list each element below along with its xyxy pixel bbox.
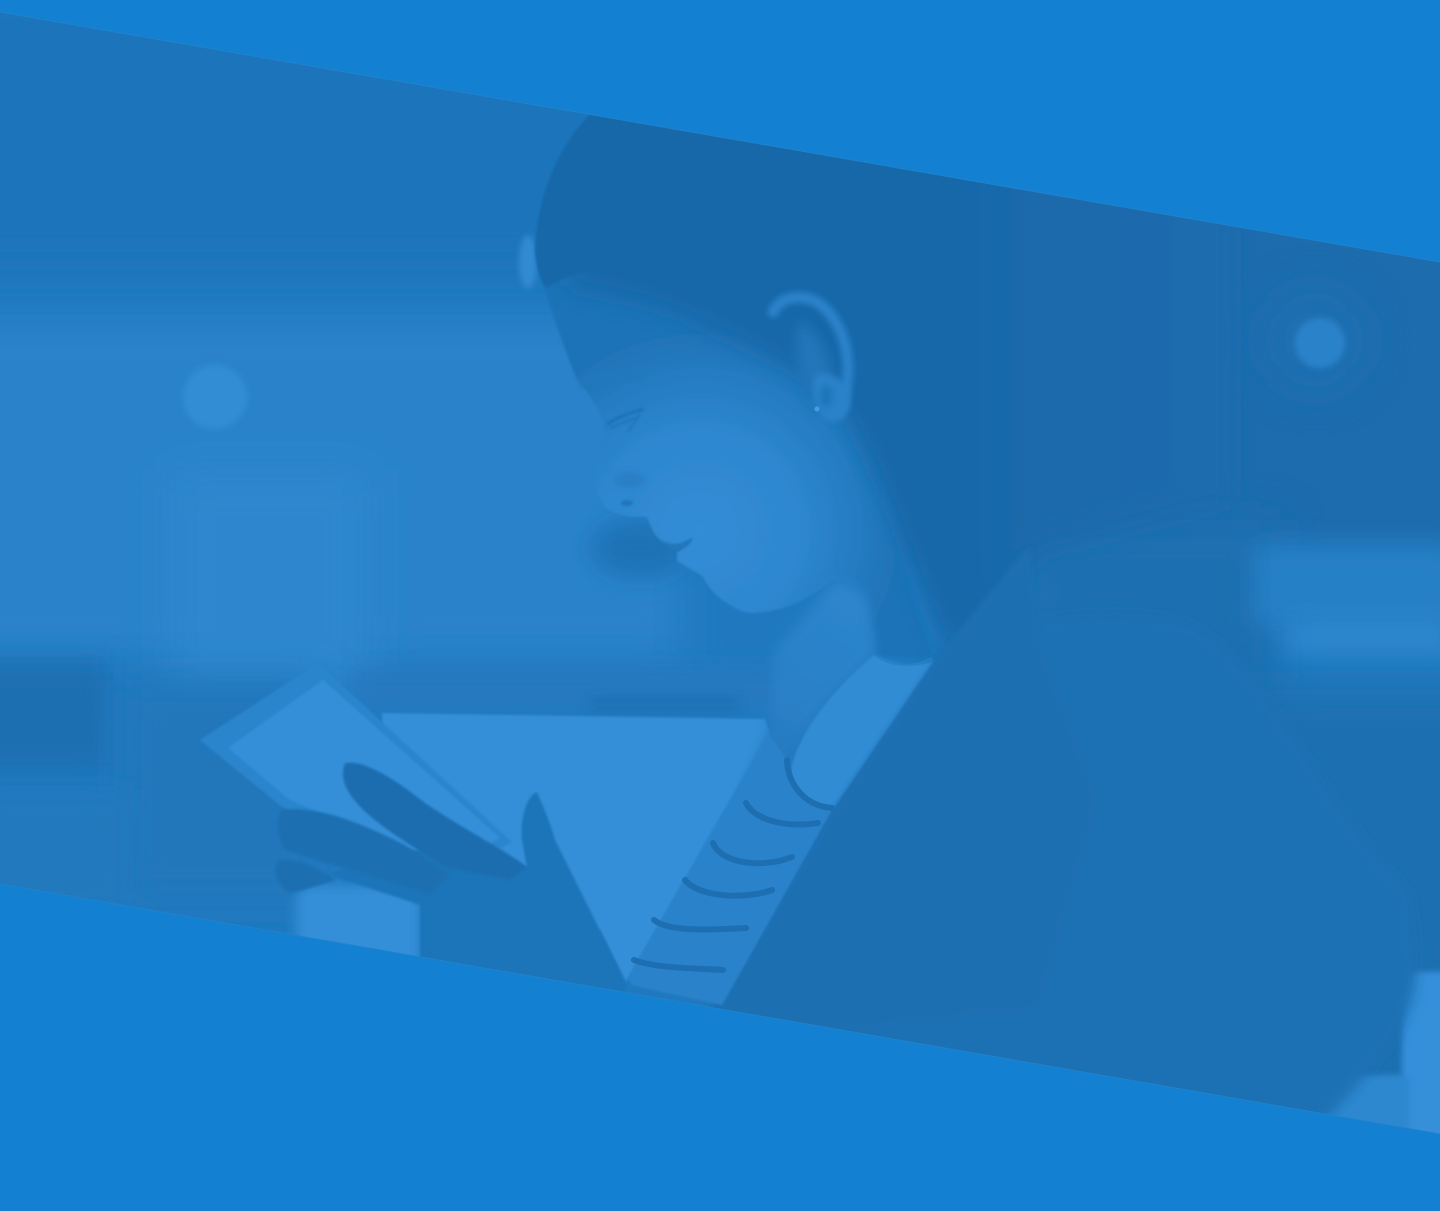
woman: ear [773,297,850,422]
blurred office background [0,333,765,768]
woman: face and neck [548,292,836,613]
hand and fingers [276,762,624,976]
woman: necklace [876,656,932,665]
cup in foreground [293,882,420,956]
woman: bare chest [790,655,935,810]
woman: brow, eye and nose details [608,408,692,550]
woman: striped top [628,733,833,1005]
tablet [201,678,510,848]
bokeh light: left [185,368,245,427]
index finger [343,763,527,880]
woman: shoulder and jacket [859,972,1422,1115]
middle finger [279,808,413,867]
woman: hair [518,115,1039,642]
woman: jacket front [834,578,1031,807]
woman: neck and lapel [762,582,873,741]
woman: chin shadow on background [590,518,690,578]
table surface [382,713,770,982]
right background [1036,226,1440,1134]
palm and thumb [336,792,624,976]
ring finger [275,859,335,893]
